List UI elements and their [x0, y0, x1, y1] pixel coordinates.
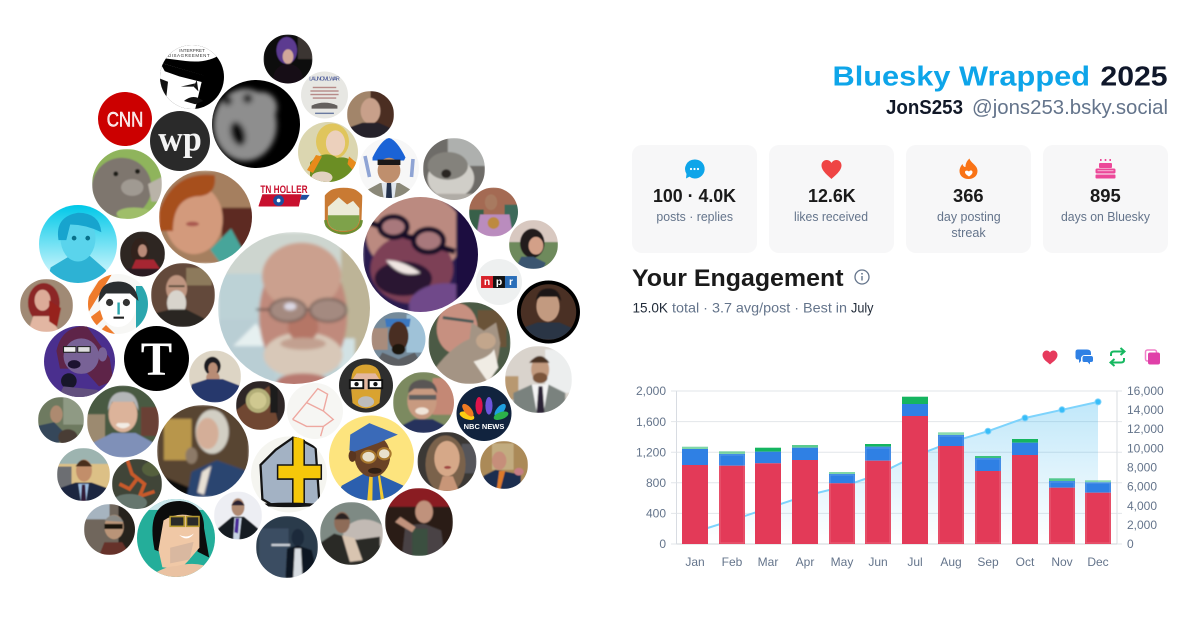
bar: Feb: [719, 451, 745, 544]
avatar: cartoon man in UVA cap: [329, 416, 414, 500]
avatar: Washington Post logo: [150, 111, 210, 171]
cumulative area and line: [695, 399, 1101, 544]
month labels: May: [831, 555, 853, 569]
avatar: bald man in black: [347, 91, 394, 138]
stat card: posts and replies: posts · replies: [656, 210, 733, 224]
icon: info: [855, 270, 869, 284]
month labels: Jan: [685, 555, 705, 569]
stat card: likes received: [769, 145, 894, 253]
month labels: Aug: [940, 555, 962, 569]
bar: Nov: [1049, 478, 1075, 544]
stat card: days on Bluesky: [1043, 145, 1168, 253]
avatar: man with dog: [38, 397, 84, 445]
right axis labels: 6,000: [1127, 480, 1157, 494]
month labels: [685, 555, 1109, 569]
engagement summary: total · 3.7 avg/post · Best in: [672, 300, 847, 316]
title: 2025: [1100, 60, 1168, 92]
bar: Jul: [902, 397, 928, 544]
right axis labels: 10,000: [1127, 441, 1164, 455]
bar: Oct: [1012, 439, 1038, 544]
avatar: man in hoodie: [372, 312, 428, 366]
avatar: woman on TV: [120, 232, 165, 278]
avatar: man in dark coat: [320, 502, 383, 565]
avatar: woman in denim: [509, 220, 558, 269]
avatar: man with black ring: [517, 280, 580, 344]
avatar: blonde cartoon woman: [298, 122, 358, 184]
combo chart: engagement per month: [636, 384, 1164, 569]
avatar: laughing man with glasses: [363, 197, 478, 312]
stat card: day posting streak: streak: [951, 226, 986, 240]
right axis labels: 16,000: [1127, 384, 1164, 398]
user name and handle: [886, 97, 1168, 119]
avatar: New York Times logo: T: [141, 334, 172, 386]
bar: May: [829, 472, 855, 544]
icon: reposts: [1110, 348, 1124, 366]
avatar: man in blue party hat: [363, 138, 415, 198]
avatar: grey suit man: [505, 346, 572, 413]
engagement summary: 15.0K: [632, 300, 669, 316]
avatar: wombat: [92, 149, 162, 220]
stat card: days on Bluesky: 895: [1090, 186, 1121, 206]
avatar: red line sketch: [287, 383, 343, 439]
avatar: woman in blue gown: [189, 350, 241, 402]
stat card: posts and replies: [632, 145, 757, 253]
icon: heart: [822, 160, 842, 179]
month labels: Jul: [907, 555, 923, 569]
avatar: man in suit with purple tie: [214, 492, 262, 540]
left axis labels: 400: [646, 506, 666, 520]
icon: likes: [1042, 350, 1058, 364]
avatar: CNN logo: [98, 92, 152, 146]
icon: birthday cake: [1096, 159, 1116, 178]
avatar: blurred ghost face: [212, 80, 300, 168]
avatar: cartoon with orange stripes: [88, 274, 151, 337]
month labels: Oct: [1016, 555, 1035, 569]
left axis labels: 0: [659, 537, 666, 551]
chart legend: [1042, 348, 1160, 366]
bar: Jun: [865, 444, 891, 544]
stat card: day posting streak: day posting: [937, 210, 1001, 224]
avatar: man holding food: [469, 188, 519, 236]
bar: Mar: [755, 448, 781, 544]
avatar: Schumer pointing: [480, 441, 528, 489]
avatar: forest service badge: [324, 188, 363, 234]
avatar: purple hair: [264, 34, 312, 84]
bar: Aug: [938, 432, 964, 544]
right axis labels: 12,000: [1127, 422, 1164, 436]
avatar: yellow cross mitre: [251, 436, 327, 512]
stat card: days on Bluesky: days on Bluesky: [1061, 210, 1151, 224]
user name and handle: @jons253.bsky.social: [972, 97, 1168, 119]
avatar: main profile photo of bald man with glasses: [218, 232, 370, 384]
stat card: likes received: 12.6K: [808, 186, 856, 206]
avatar: New York Times logo: [124, 326, 189, 391]
avatar: blue cartoon man: [39, 205, 117, 283]
month labels: Apr: [796, 555, 814, 569]
avatar: noir figure: [256, 516, 318, 578]
avatar: cartoon with microphone: [44, 326, 115, 397]
month labels: Mar: [758, 555, 778, 569]
right axis labels: 8,000: [1127, 460, 1157, 474]
icon: speech bubble: [685, 159, 705, 178]
avatar: pallas cat: [423, 138, 485, 203]
avatar: map texture: [112, 459, 162, 512]
avatar: man at capitol: [57, 448, 110, 501]
month labels: Feb: [722, 555, 743, 569]
avatar: Kronk cartoon: [137, 499, 215, 577]
bar: Sep: [975, 456, 1001, 544]
avatar: red-haired woman: [20, 279, 73, 332]
right axis labels: 2,000: [1127, 518, 1157, 532]
avatar: Washington Post logo: wp: [158, 119, 202, 159]
bar: Apr: [792, 445, 818, 544]
icon: flame: [960, 158, 978, 179]
avatar cluster: [20, 34, 580, 578]
left axis labels: [636, 384, 666, 551]
icon: quotes: [1146, 350, 1160, 364]
avatar: comic noir face: [160, 45, 224, 109]
bar: Dec: [1085, 480, 1111, 544]
avatar: man in red room: [385, 488, 453, 556]
right axis labels: 4,000: [1127, 499, 1157, 513]
stat card: likes received: likes received: [794, 210, 868, 224]
avatar: TN Holler logo: [258, 186, 310, 206]
left axis labels: 1,200: [636, 446, 666, 460]
stat card: posts and replies: 100 · 4.0K: [653, 186, 736, 206]
month labels: Jun: [868, 555, 888, 569]
avatar: NPR logo: [476, 259, 522, 305]
heading: Your Engagement: Your Engagement: [632, 265, 844, 292]
right axis labels: 14,000: [1127, 403, 1164, 417]
avatar: man in sunglasses on street: [84, 504, 136, 555]
title: [832, 60, 1168, 92]
avatar: senator with white hair: [157, 405, 249, 497]
avatar: cartoon bearded man with glasses: [339, 358, 393, 412]
avatar: NBC News logo: [456, 386, 512, 441]
engagement summary: July: [851, 300, 874, 316]
stat card: day posting streak: 366: [953, 186, 984, 206]
avatar: pocket watch: [236, 381, 285, 430]
avatar: man with cat: [428, 302, 510, 384]
right axis labels: 0: [1127, 537, 1134, 551]
left axis labels: 2,000: [636, 384, 666, 398]
icon: replies: [1076, 350, 1093, 364]
right axis labels: [1127, 384, 1164, 551]
avatar: bearded man with glasses: [151, 263, 215, 327]
month labels: Dec: [1087, 555, 1109, 569]
user name and handle: JonS253: [886, 97, 963, 119]
bar: Jan: [682, 447, 708, 544]
avatar: young woman: [418, 432, 476, 493]
avatar: letter card: [301, 72, 348, 118]
stat card: day posting streak: [906, 145, 1031, 253]
month labels: Sep: [977, 555, 999, 569]
avatar: George Takei: [87, 386, 159, 458]
avatar: woman with red hair: [159, 170, 254, 268]
month labels: Nov: [1051, 555, 1073, 569]
left axis labels: 800: [646, 476, 666, 490]
title: Bluesky Wrapped: [832, 60, 1090, 92]
left axis labels: 1,600: [636, 415, 666, 429]
avatar: smiling man with glasses: [393, 372, 457, 433]
